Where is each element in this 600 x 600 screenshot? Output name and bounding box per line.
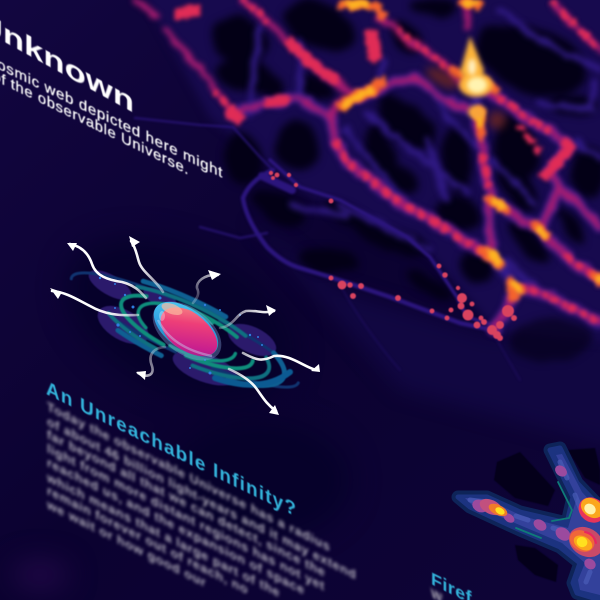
- firefly hot spot left: [477, 496, 509, 519]
- blurred body text: which means that a large part of the: [46, 469, 280, 600]
- dark voids near filament illustration: [494, 448, 600, 582]
- red nodes along filaments: [180, 0, 600, 323]
- filament layers: [458, 448, 600, 600]
- blurred body text: light from more distant regions has not yet: [47, 441, 325, 594]
- bright hub of the cosmic web: [459, 36, 493, 119]
- blurred body text: far beyond all that we can detect, since the: [47, 427, 325, 580]
- cosmic web magenta filaments: [135, 0, 600, 330]
- indigo mass of the cosmic web: [130, 0, 600, 345]
- thin purple filament walls: [135, 118, 520, 380]
- dark zones of the foreground: [42, 206, 350, 540]
- blurred body text: of about 46 billion light-years and it may extend: [47, 414, 356, 583]
- cosmic web indigo walls: [233, 10, 600, 330]
- pink halos: [470, 463, 598, 572]
- pink clustered bubbles: [269, 171, 517, 341]
- lower indigo field: [250, 220, 600, 450]
- faint magenta haze lower left: [12, 561, 68, 589]
- filament illustration with fireflies: [458, 448, 600, 600]
- icon: galaxy with expanding arrows: [50, 236, 320, 415]
- galaxy disk: [62, 254, 308, 406]
- firefly hot spot right upper: [574, 492, 600, 528]
- intro text: osmic web depicted here might: [0, 56, 223, 182]
- dark voids of the cosmic web: [203, 0, 600, 362]
- firefly hot spot right lower: [563, 521, 600, 563]
- heading: An Unreachable Infinity?: An Unreachable Infinity?: [46, 378, 296, 521]
- galaxy core: [152, 302, 222, 360]
- warm glow near hub: [423, 63, 506, 129]
- arrowheads: [50, 236, 320, 415]
- blurred body text: reached us, and the expansion of space: [47, 455, 305, 598]
- orange hot filaments: [342, 2, 600, 298]
- blurred body text: we wait or how good our: [46, 496, 206, 590]
- yellow hot spots: [344, 3, 600, 291]
- expansion arrows: [52, 241, 316, 411]
- blurred body text: remain forever out of reach, no: [47, 483, 248, 597]
- blurred body text: Today the observable Universe has a radius: [47, 399, 330, 554]
